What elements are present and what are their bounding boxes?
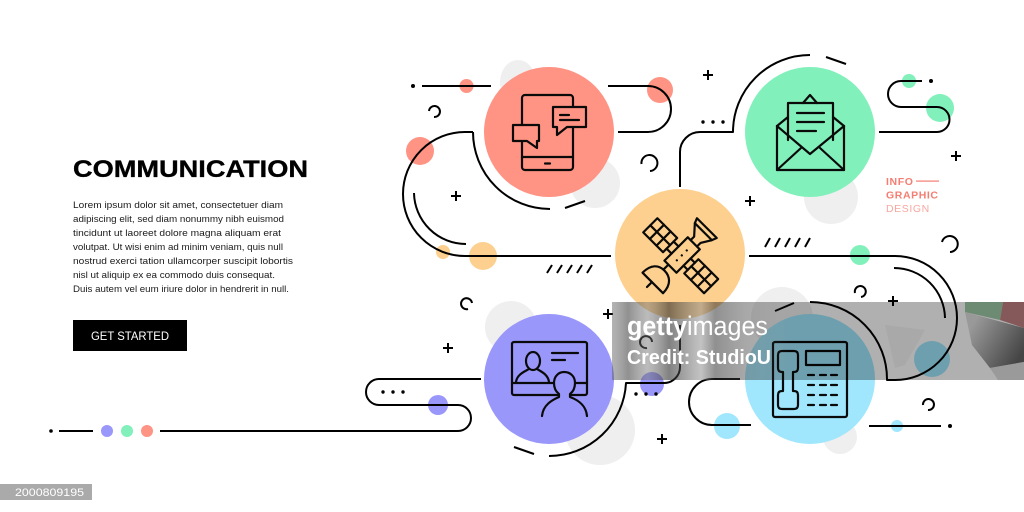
icon: satellite xyxy=(618,198,738,319)
button: get started xyxy=(73,320,187,351)
body text block: adipiscing elit, sed diam nonummy nibh euismod xyxy=(73,214,284,225)
text block: infographic design xyxy=(886,176,939,215)
body text block: Duis autem vel eum iriure dolor in hendrerit in null. xyxy=(73,284,289,295)
body text block: nostrud exerci tation ullamcorper suscipit lobortis xyxy=(73,256,293,267)
plus signs xyxy=(443,70,961,444)
body text block: volutpat. Ut wisi enim ad minim veniam, quis null xyxy=(73,242,283,253)
body text block xyxy=(73,200,293,295)
icon: tablet with chat bubbles xyxy=(513,95,586,170)
icon: open envelope xyxy=(777,95,844,170)
panel: video call xyxy=(484,314,614,444)
panel: satellite xyxy=(615,189,745,319)
watermark credit text: Credit: StudioU xyxy=(627,347,771,369)
title: COMMUNICATION xyxy=(73,156,308,183)
watermark logo text: gettyimages xyxy=(627,311,768,341)
text block: infographic design: DESIGN xyxy=(886,203,930,215)
button: get started: GET STARTED xyxy=(91,331,169,343)
legend dots xyxy=(101,425,153,437)
image id badge: 2000809195 xyxy=(15,487,84,499)
small dots xyxy=(49,79,952,433)
panel: email xyxy=(745,67,875,197)
connector lines xyxy=(59,55,957,456)
watermark band xyxy=(612,302,1024,380)
grey background blobs xyxy=(485,60,858,465)
panel: desk phone xyxy=(745,314,875,444)
colored accent dots xyxy=(406,74,954,439)
body text block: tincidunt ut laoreet dolore magna aliquam erat xyxy=(73,228,281,239)
small decorative hooks xyxy=(429,106,958,410)
body text block: Lorem ipsum dolor sit amet, consectetuer diam xyxy=(73,200,283,211)
hatch marks xyxy=(547,238,810,273)
text block: infographic design: INFO xyxy=(886,176,913,188)
body text block: nisl ut aliquip ex ea commodo duis consequat. xyxy=(73,270,275,281)
image id badge xyxy=(0,484,92,500)
icon: desk telephone xyxy=(773,342,847,417)
icon: video call with two people xyxy=(512,342,587,416)
text block: infographic design: GRAPHIC xyxy=(886,190,939,202)
panel: mobile chat xyxy=(484,67,614,197)
